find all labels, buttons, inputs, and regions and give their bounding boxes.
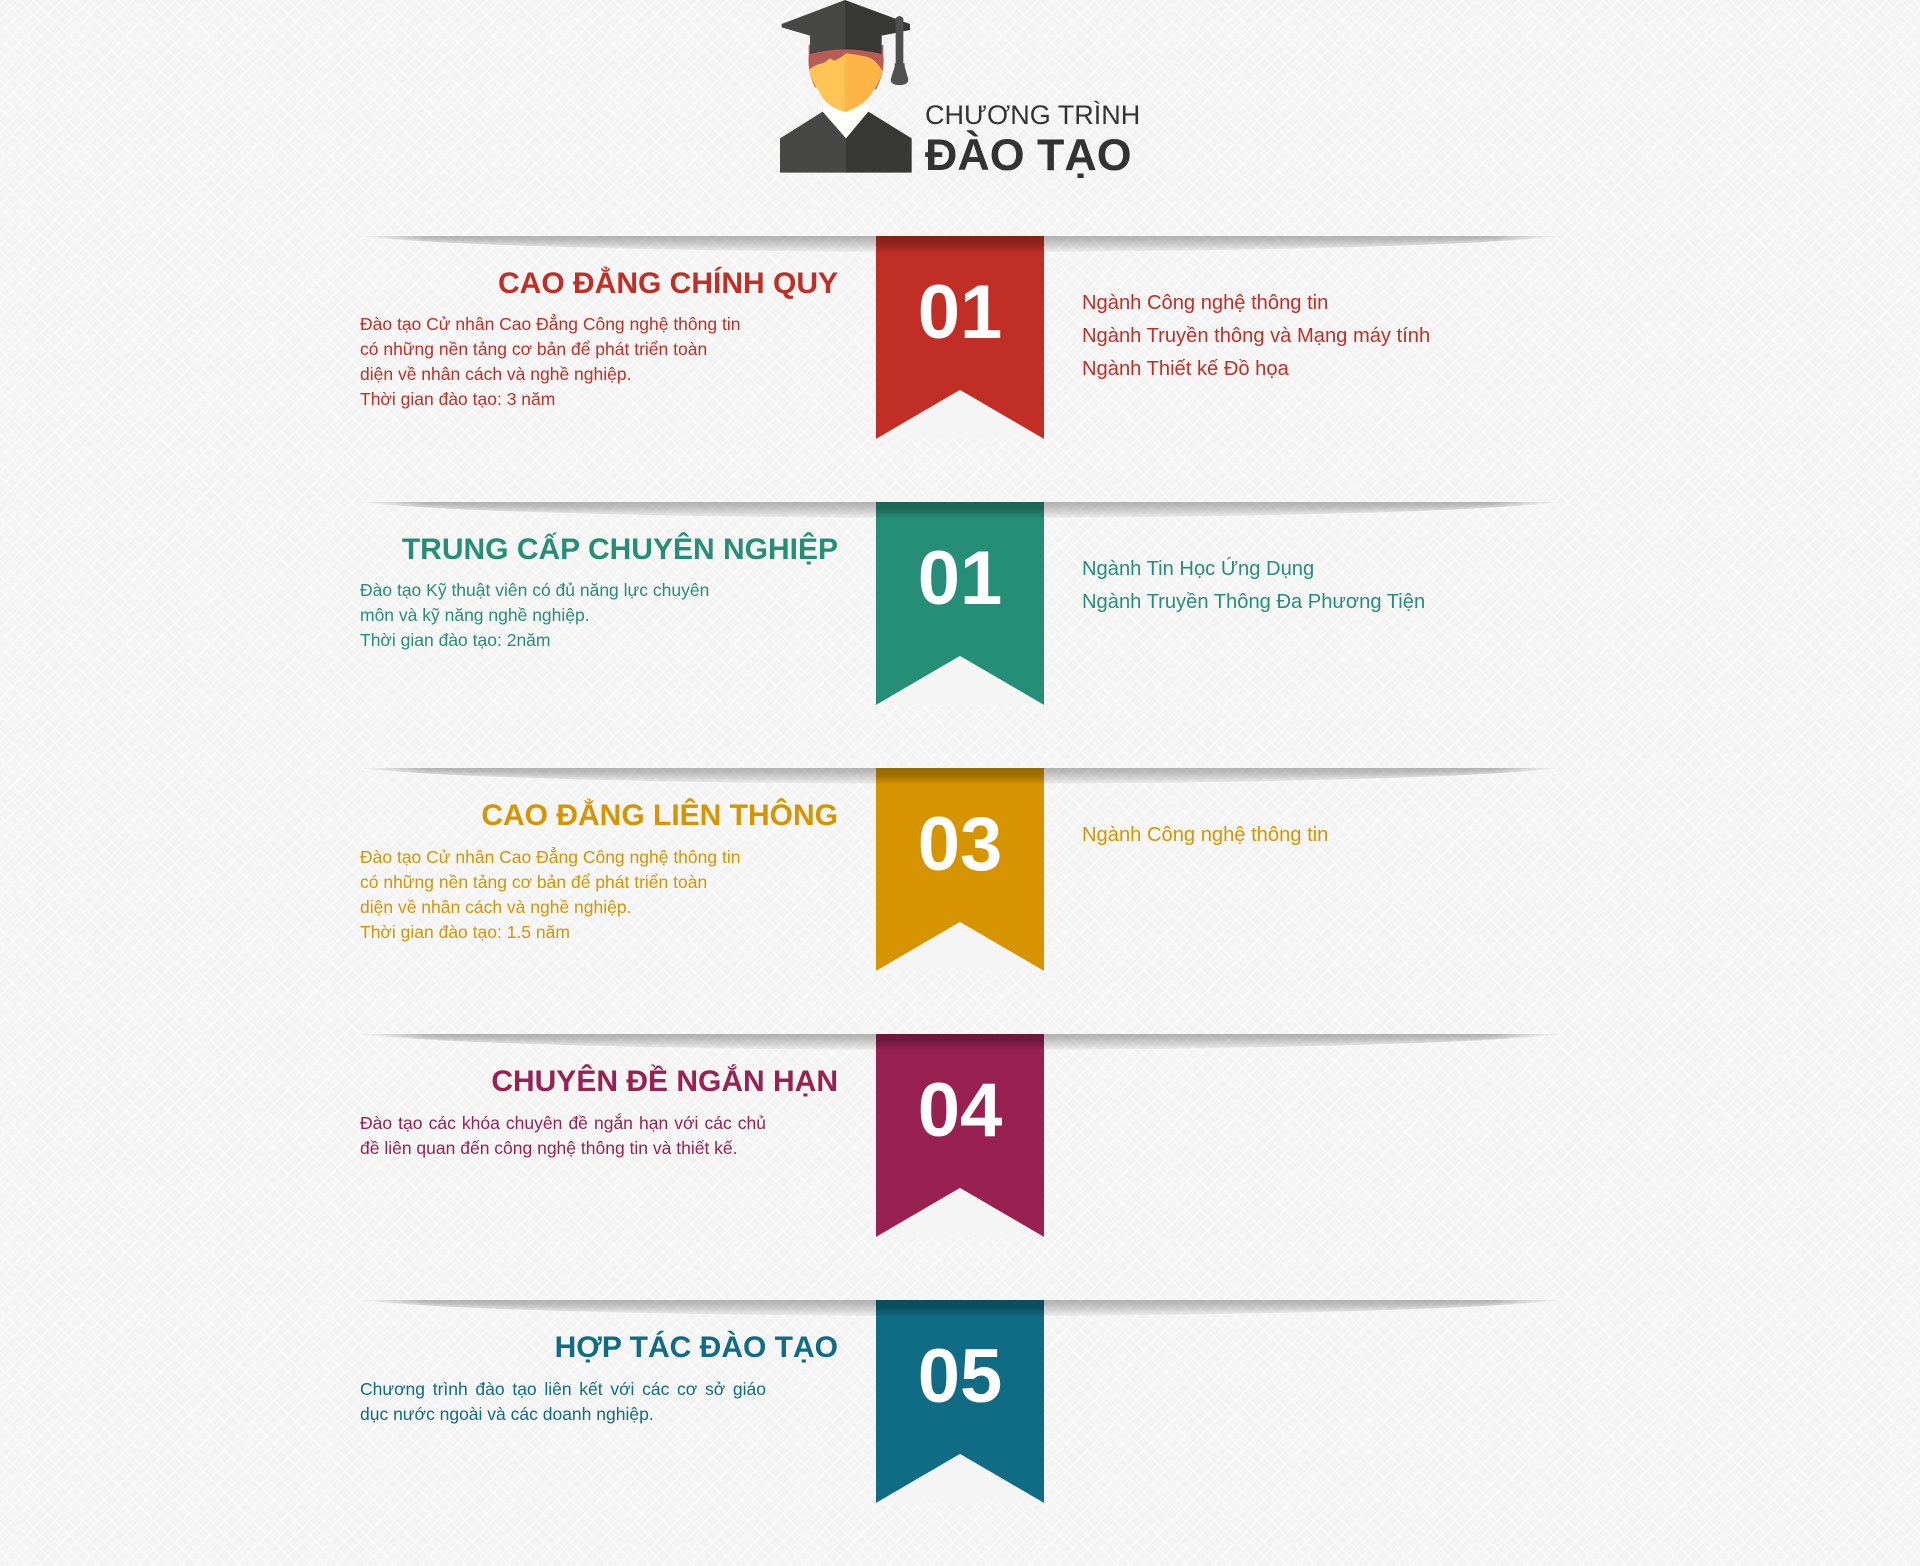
panel: chuyen de ngan han [360, 1034, 1552, 1237]
icon: hair [808, 45, 884, 89]
description: có những nền tảng cơ bản để phát triển toàn [360, 339, 707, 359]
title line 1: CHƯƠNG TRÌNH [925, 100, 1140, 130]
heading: CAO ĐẲNG LIÊN THÔNG [481, 799, 838, 832]
description [360, 1379, 766, 1424]
description: Đào tạo các khóa chuyên đề ngắn hạn với các chủ [360, 1113, 766, 1133]
description: đề liên quan đến công nghệ thông tin và thiết kế. [360, 1138, 738, 1158]
ribbon 04 [876, 1034, 1044, 1237]
panel: trung cap chuyen nghiep [360, 502, 1552, 705]
list of majors: Ngành Tin Học Ứng Dụng [1082, 558, 1314, 580]
panel: cao dang lien thong [360, 768, 1552, 971]
description: Thời gian đào tạo: 2năm [360, 630, 550, 650]
ribbon 03 [876, 768, 1044, 971]
description: Thời gian đào tạo: 3 năm [360, 389, 555, 409]
panel: hop tac dao tao [360, 1300, 1552, 1503]
header icon: graduate [780, 0, 912, 173]
ribbon 01 [876, 502, 1044, 705]
icon: gown right [846, 112, 912, 173]
description: Đào tạo Kỹ thuật viên có đủ năng lực chuyên [360, 580, 709, 600]
description: diện về nhân cách và nghề nghiệp. [360, 364, 631, 384]
heading: TRUNG CẤP CHUYÊN NGHIỆP [402, 533, 838, 566]
description: Chương trình đào tạo liên kết với các cơ sở giáo [360, 1379, 766, 1399]
list of majors: Ngành Công nghệ thông tin [1082, 824, 1328, 846]
list of majors: Ngành Công nghệ thông tin [1082, 292, 1328, 314]
heading: CHUYÊN ĐỀ NGẮN HẠN [491, 1065, 838, 1098]
list of majors: Ngành Truyền Thông Đa Phương Tiện [1082, 591, 1425, 613]
icon: cap right [845, 0, 910, 54]
ribbon 01: 01 [918, 536, 1002, 621]
ribbon 05: 05 [918, 1334, 1002, 1419]
panel: cao dang chinh quy [360, 236, 1552, 439]
description: Đào tạo Cử nhân Cao Đẳng Công nghệ thông tin [360, 847, 740, 867]
description [360, 314, 740, 409]
icon: face shade [845, 54, 882, 112]
heading: HỢP TÁC ĐÀO TẠO [555, 1331, 838, 1364]
icon: collar [823, 104, 868, 138]
description [360, 580, 709, 650]
ribbon 01 [876, 236, 1044, 439]
description: có những nền tảng cơ bản để phát triển toàn [360, 872, 707, 892]
description: môn và kỹ năng nghề nghiệp. [360, 605, 590, 625]
ribbon 05 [876, 1300, 1044, 1503]
description [360, 1113, 766, 1158]
icon: cap left [782, 0, 845, 54]
icon: gown left [780, 112, 846, 173]
title [925, 100, 1140, 180]
description: diện về nhân cách và nghề nghiệp. [360, 897, 631, 917]
icon: tassel [891, 16, 908, 85]
description: Đào tạo Cử nhân Cao Đẳng Công nghệ thông tin [360, 314, 740, 334]
ribbon 04: 04 [918, 1068, 1002, 1153]
ribbon 03: 03 [918, 802, 1002, 887]
heading: CAO ĐẲNG CHÍNH QUY [498, 267, 838, 300]
title line 2: ĐÀO TẠO [925, 130, 1132, 180]
list of majors: Ngành Thiết kế Đồ họa [1082, 358, 1289, 380]
list of majors: Ngành Truyền thông và Mạng máy tính [1082, 325, 1430, 347]
list of majors [1082, 292, 1430, 380]
description: dục nước ngoài và các doanh nghiệp. [360, 1404, 654, 1424]
icon: face [809, 53, 882, 112]
description [360, 847, 740, 942]
list of majors [1082, 557, 1425, 613]
description: Thời gian đào tạo: 1.5 năm [360, 922, 570, 942]
ribbon 01: 01 [918, 270, 1002, 355]
